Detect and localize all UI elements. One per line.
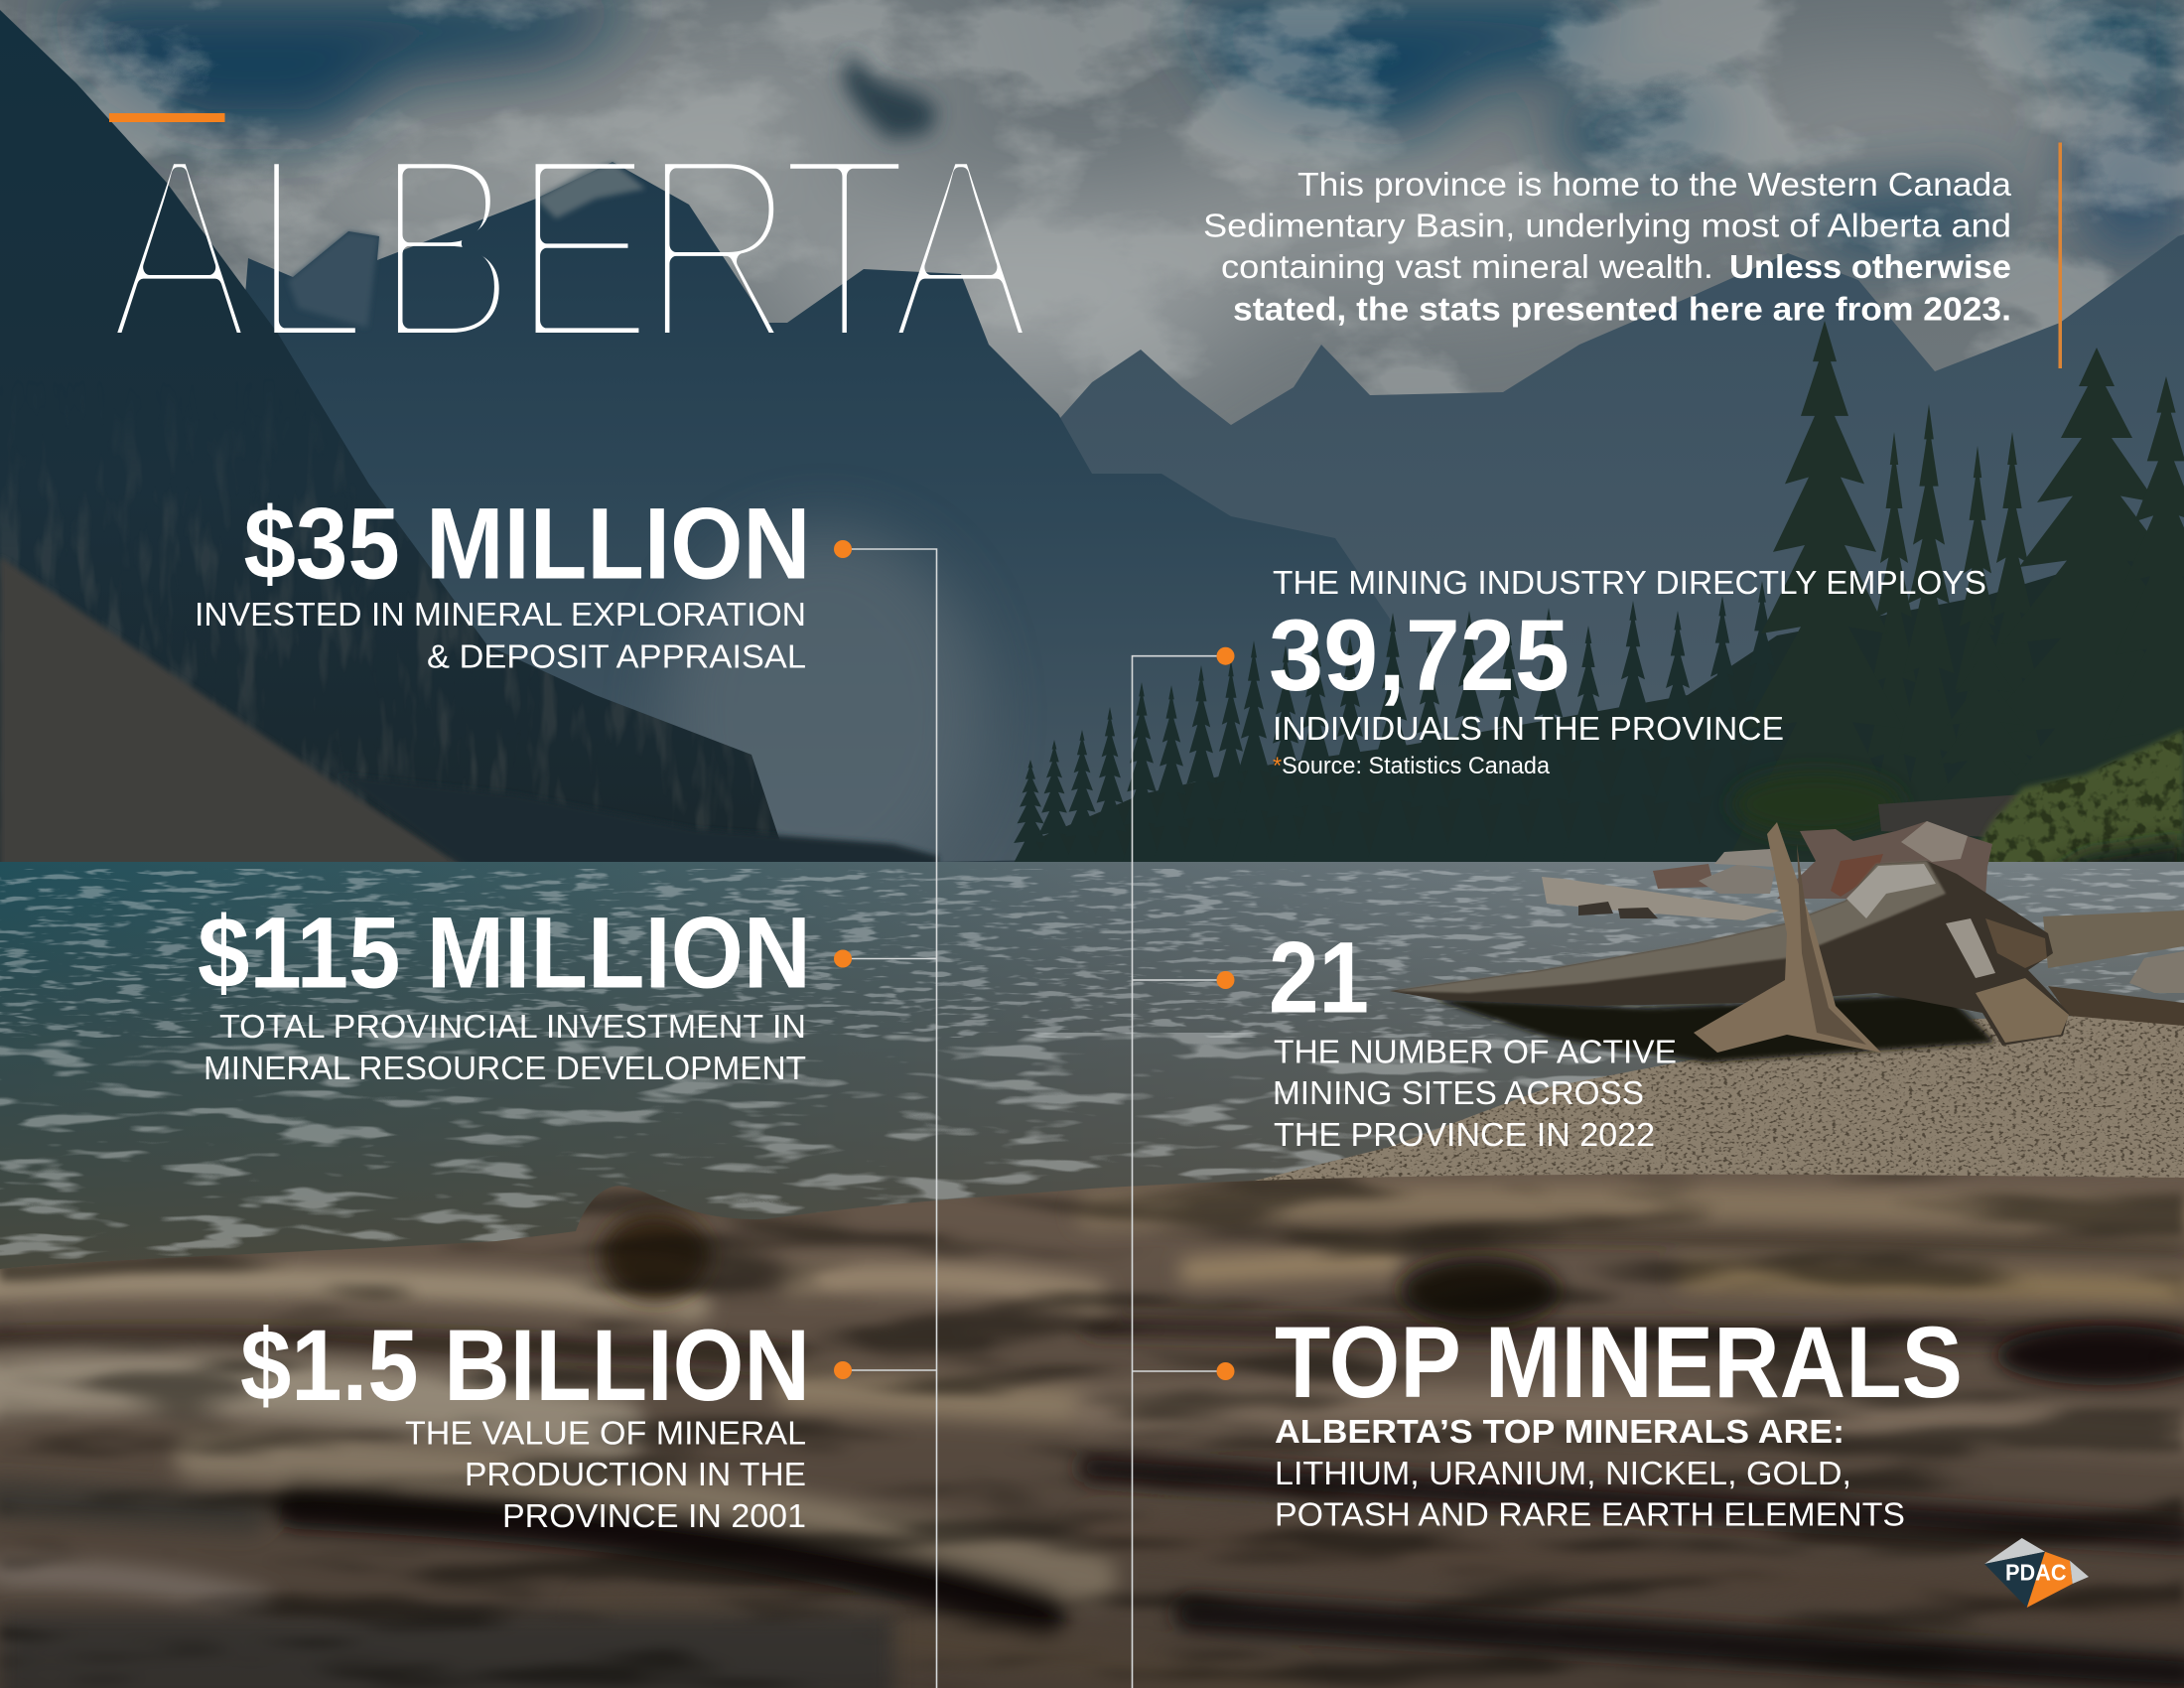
stat: $1.5 billion: PRODUCTION IN THE xyxy=(465,1456,806,1492)
beach xyxy=(1231,1013,2184,1187)
green tree behind rocks xyxy=(1732,773,1901,836)
logo: PDAC: PDAC xyxy=(2005,1560,2067,1586)
stat: top minerals: POTASH AND RARE EARTH ELEMENTS xyxy=(1275,1495,1905,1533)
stat: $115 million: TOTAL PROVINCIAL INVESTMENT IN xyxy=(219,1008,806,1045)
intro paragraph xyxy=(1203,166,2012,328)
stat: active mining sites: 21 xyxy=(1269,921,1369,1035)
marker dot xyxy=(1217,647,1235,665)
intro paragraph: stated, the stats presented here are from 2023. xyxy=(1233,290,2011,328)
stat: $1.5 billion xyxy=(240,1309,852,1534)
stat: $115 million: MINERAL RESOURCE DEVELOPMENT xyxy=(204,1050,806,1086)
stat: $115 million: $115 MILLION xyxy=(198,896,811,1009)
log grain texture xyxy=(0,1172,2184,1688)
log stripes xyxy=(0,1202,2184,1688)
log foreground xyxy=(0,1142,2184,1688)
far mountains xyxy=(1052,234,2184,874)
clouds texture xyxy=(0,0,2184,516)
stat: employment: THE MINING INDUSTRY DIRECTLY EMPLOYS xyxy=(1273,564,1986,601)
bright cloud masses xyxy=(238,20,2105,397)
valley haze xyxy=(665,526,983,904)
stat: $115 million xyxy=(198,896,852,1086)
stat: $1.5 billion: $1.5 BILLION xyxy=(240,1309,810,1422)
marker dot xyxy=(1217,1362,1235,1380)
stat: $1.5 billion: THE VALUE OF MINERAL xyxy=(405,1414,806,1452)
stat: employment xyxy=(1217,564,1986,779)
intro paragraph: This province is home to the Western Canada xyxy=(1297,166,2012,203)
stat: top minerals: LITHIUM, URANIUM, NICKEL, GOLD, xyxy=(1275,1455,1851,1491)
forest base xyxy=(1013,536,2184,869)
snow patch xyxy=(536,162,645,218)
intro paragraph: Sedimentary Basin, underlying most of Alberta and xyxy=(1203,207,2011,244)
stat: $35 million: INVESTED IN MINERAL EXPLORATION xyxy=(195,596,806,633)
central mountains xyxy=(199,162,1410,874)
dark cloud xyxy=(844,50,938,139)
marker dot xyxy=(834,1361,852,1379)
water ripples far xyxy=(0,869,2184,1038)
logo: PDAC xyxy=(1984,1538,2089,1608)
driftwood shadow xyxy=(1430,993,1995,1062)
stat: top minerals xyxy=(1217,1306,1963,1533)
driftwood back log xyxy=(1542,877,1780,920)
water xyxy=(0,862,2184,1299)
stat: $35 million: & DEPOSIT APPRAISAL xyxy=(427,637,806,675)
forest trees xyxy=(1010,581,1795,876)
cliff texture xyxy=(0,464,768,832)
water ripples near xyxy=(0,1033,2184,1291)
small stones xyxy=(1578,902,1658,918)
stat: active mining sites: MINING SITES ACROSS xyxy=(1273,1074,1644,1111)
bush xyxy=(1968,730,2184,904)
stat: $1.5 billion: PROVINCE IN 2001 xyxy=(502,1497,806,1534)
marker dot xyxy=(834,949,852,967)
right logs xyxy=(2043,911,2184,1026)
main log xyxy=(1390,861,2069,1046)
left mountain xyxy=(0,10,794,869)
stat: $35 million xyxy=(195,487,852,675)
stat: employment: INDIVIDUALS IN THE PROVINCE xyxy=(1273,710,1784,747)
connector line: left column xyxy=(851,549,937,1688)
log dark knots xyxy=(0,1211,2184,1688)
scree slope xyxy=(0,557,467,869)
accent rule beside paragraph xyxy=(2059,143,2062,368)
stat: employment: *Source: Statistics Canada xyxy=(1273,753,1551,779)
rocks xyxy=(1653,821,1992,899)
shelter xyxy=(1878,794,2023,837)
sky xyxy=(0,0,2184,695)
lighter distant peak xyxy=(288,231,379,328)
stat: top minerals: ALBERTA’S TOP MINERALS ARE: xyxy=(1275,1413,1844,1450)
bush foliage texture xyxy=(1985,730,2184,862)
marker dot xyxy=(1217,971,1235,989)
title: ALBERTA: ALBERTA xyxy=(106,98,1034,398)
stump xyxy=(1694,822,1881,1053)
connector line: right column xyxy=(1132,656,1219,1688)
stat: top minerals: TOP MINERALS xyxy=(1275,1306,1963,1419)
intro paragraph: Unless otherwise xyxy=(1729,248,2011,285)
blue sky patches xyxy=(60,0,2184,268)
stat: $35 million: $35 MILLION xyxy=(244,487,810,600)
stat: active mining sites: THE PROVINCE IN 2022 xyxy=(1274,1116,1655,1153)
stat: active mining sites xyxy=(1217,921,1677,1153)
stat: employment: 39,725 xyxy=(1269,599,1570,712)
stat: active mining sites: THE NUMBER OF ACTIVE xyxy=(1274,1033,1677,1070)
gravel texture xyxy=(1231,1013,2184,1187)
marker dot xyxy=(834,540,852,558)
root ball highlights xyxy=(1846,864,1936,918)
dark treeline left xyxy=(338,774,938,869)
log upper highlight xyxy=(1390,861,1946,993)
intro paragraph: containing vast mineral wealth. xyxy=(1221,248,1713,285)
accent bar above title xyxy=(109,113,224,122)
tall pines xyxy=(1725,321,2184,874)
